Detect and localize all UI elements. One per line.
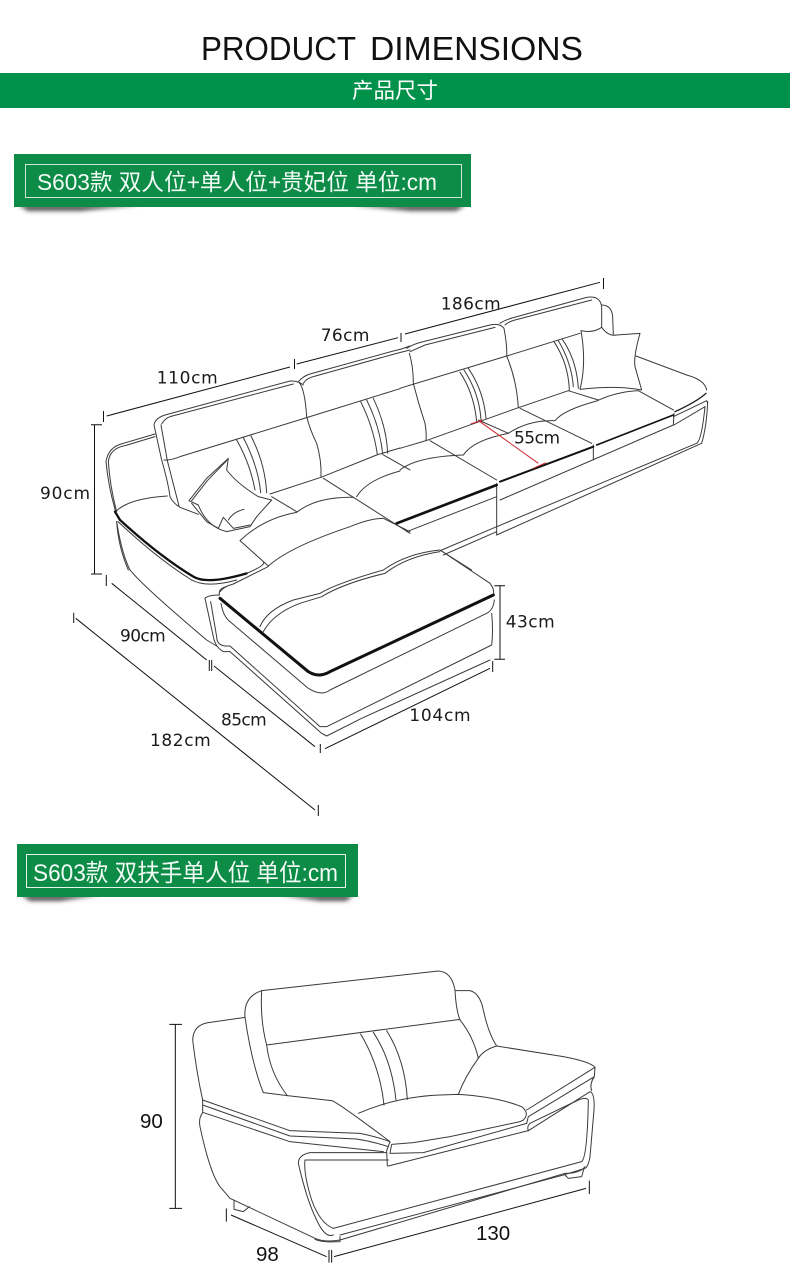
armchair: backrest <box>245 971 497 1105</box>
armchair line drawing <box>193 971 595 1242</box>
sectional sofa line drawing <box>106 297 708 736</box>
label: 76cm: 76cm <box>321 326 369 346</box>
sofa: left part of back and arm <box>106 346 410 570</box>
label: 90cm depth: 90cm <box>120 627 166 647</box>
banner: two-arm single seat model: S603款 双扶手单人位 单位:cm <box>33 860 338 887</box>
armchair: legs <box>234 1168 584 1242</box>
armchair: right arm <box>333 1046 595 1235</box>
title <box>201 30 583 67</box>
armchair: seat cushion <box>358 1094 527 1153</box>
label: armchair depth 98: 98 <box>256 1243 279 1266</box>
label: 186cm: 186cm <box>441 294 501 314</box>
label: seat depth 55cm: 55cm <box>514 428 560 448</box>
label: 43cm: 43cm <box>506 612 555 632</box>
dimension lines: sectional sofa <box>74 278 603 816</box>
banner: two-arm single seat model <box>17 844 358 901</box>
label: 85cm: 85cm <box>221 711 267 731</box>
armchair: front panel <box>298 1153 387 1236</box>
header band: 产品尺寸: 产品尺寸 <box>352 79 438 103</box>
banner: sectional sofa model: S603款 双人位+单人位+贵妃位 单位:cm <box>37 169 437 195</box>
label: armchair width 130: 130 <box>476 1222 510 1245</box>
label: 104cm: 104cm <box>409 706 471 726</box>
armchair: left arm <box>193 1017 585 1241</box>
label: 110cm: 110cm <box>157 368 218 388</box>
banner: sectional sofa model <box>14 154 471 211</box>
sofa: right part of back, seats and pillow <box>397 297 708 570</box>
title: DIMENSIONS <box>370 30 583 67</box>
label: height 90cm: 90cm <box>40 484 90 504</box>
label: armchair height 90: 90 <box>140 1110 163 1133</box>
header band: 产品尺寸 <box>0 73 790 108</box>
dimension lines: armchair <box>169 1024 589 1263</box>
title: PRODUCT <box>201 30 356 67</box>
label: 182cm: 182cm <box>150 731 211 751</box>
sofa: chaise and base <box>115 512 494 736</box>
red seat depth marker <box>471 420 546 468</box>
